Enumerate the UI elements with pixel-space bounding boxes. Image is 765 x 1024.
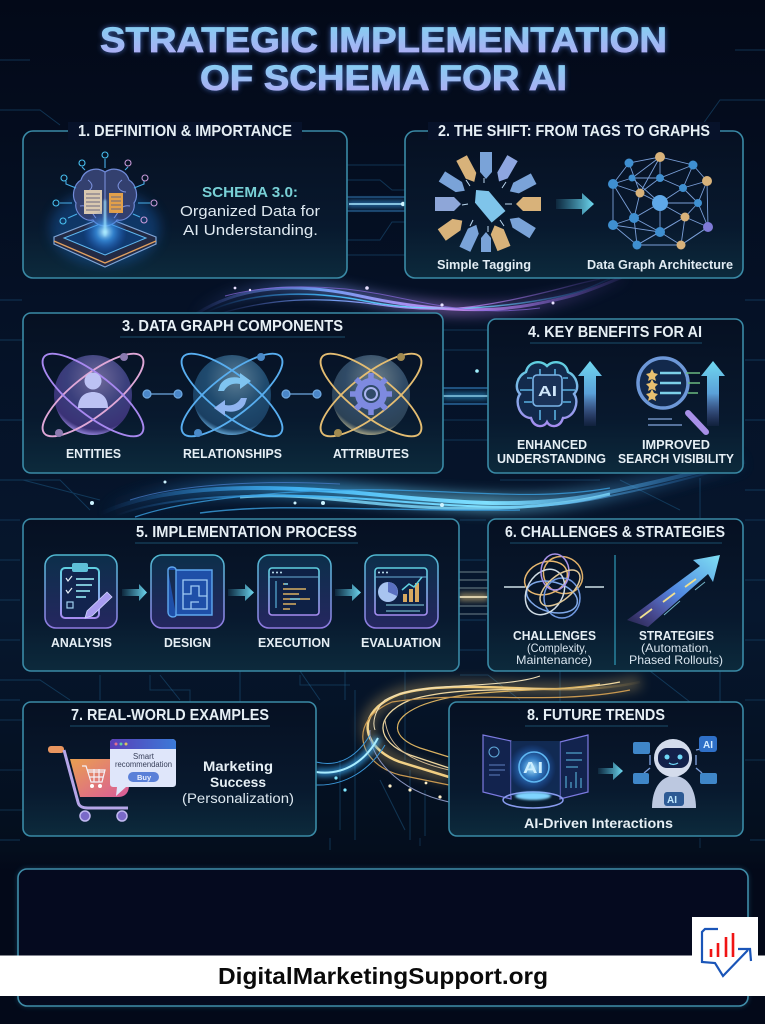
panel 8: future trends: [449, 702, 743, 836]
icon: AI brain: AI: [538, 383, 557, 400]
panel 1 text block: [180, 184, 320, 239]
arrow: tags to graph: [556, 193, 594, 215]
label: enhanced understanding: [497, 438, 606, 466]
label: evaluation: EVALUATION: [361, 636, 441, 650]
panel 5 heading: 5. IMPLEMENTATION PROCESS: [136, 524, 357, 541]
icon: AI hologram dashboard: AI: [523, 760, 543, 777]
panel 2 heading: 2. THE SHIFT: FROM TAGS TO GRAPHS: [438, 123, 710, 140]
connector: entities to relationships: [143, 390, 182, 398]
connector streak: panel 5 to panel 6: [459, 572, 488, 614]
icon: friendly robot with chat bubbles: [633, 736, 717, 808]
panel 3: data graph components: [23, 313, 443, 473]
panel 1 text block: AI Understanding.: [183, 222, 318, 239]
connector streak: panel 1 to panel 2: [347, 197, 405, 211]
label: entities: ENTITIES: [66, 447, 121, 461]
label: AI-driven interactions: AI-Driven Interactions: [524, 815, 673, 831]
arrow: design to execution: [228, 584, 254, 601]
panel 1 heading: 1. DEFINITION & IMPORTANCE: [78, 123, 292, 140]
icon: scattered tags: [435, 152, 541, 252]
arrow: hologram to robot: [598, 762, 623, 780]
panel 6: challenges and strategies: [488, 519, 743, 671]
strategies text: (Automation,: [641, 641, 712, 655]
callout: smart recommendation: [110, 739, 176, 796]
challenges text: CHALLENGES: [513, 628, 596, 643]
white footer band: [0, 956, 765, 996]
panel 1 text block: Organized Data for: [180, 203, 320, 220]
icon: magnifier over ranked results: [638, 358, 706, 432]
icon: shopping cart: [48, 746, 129, 821]
strategies text: Phased Rollouts): [629, 653, 723, 667]
icon: friendly robot with chat bubbles: AI: [667, 795, 677, 806]
arrow: up, understanding: [578, 361, 602, 426]
flowing ribbon: gold: [363, 676, 640, 802]
step tile: execution: [258, 555, 331, 628]
panel 5: implementation process: [23, 519, 459, 671]
connector streak: panel 7 to panel 8: [316, 735, 385, 792]
title: OF SCHEMA FOR AI: [200, 59, 567, 98]
icon: road arrow upward: [627, 555, 720, 627]
arrow: analysis to design: [122, 584, 147, 601]
label: improved search visibility: SEARCH VISIBILITY: [618, 452, 735, 466]
step tile: design: [151, 555, 224, 628]
panel 1: definition and importance: [23, 122, 347, 278]
label: relationships: RELATIONSHIPS: [183, 447, 282, 461]
panel 7: real-world examples: [23, 702, 316, 836]
label: enhanced understanding: UNDERSTANDING: [497, 452, 606, 466]
panel 7 text block: (Personalization): [182, 790, 294, 806]
challenges text: [513, 628, 596, 667]
panel 6 heading: 6. CHALLENGES & STRATEGIES: [505, 524, 725, 541]
panel 3 heading: 3. DATA GRAPH COMPONENTS: [122, 318, 343, 335]
footer website text: DigitalMarketingSupport.org: [218, 963, 548, 989]
callout: smart recommendation: Buy: [137, 773, 152, 782]
challenges text: Maintenance): [516, 653, 592, 667]
orb: attributes: [310, 341, 432, 449]
orb: entities: [32, 341, 154, 449]
panel 7 text block: Success: [210, 774, 266, 790]
connector: relationships to attributes: [282, 390, 321, 398]
strategies text: [629, 628, 723, 667]
icon: tangled knot: [504, 549, 604, 622]
icon: AI brain: [517, 362, 577, 426]
panel 4 heading: 4. KEY BENEFITS FOR AI: [528, 324, 702, 341]
label: analysis: ANALYSIS: [51, 636, 112, 650]
flowing ribbon: purple and blue: [190, 276, 625, 318]
panel 8 heading: 8. FUTURE TRENDS: [527, 707, 665, 724]
panel 1 text block: SCHEMA 3.0:: [202, 184, 298, 201]
icon: data graph network: [608, 152, 713, 250]
icon: AI hologram dashboard: [483, 735, 588, 808]
strategies text: STRATEGIES: [639, 628, 714, 643]
icon: friendly robot with chat bubbles: AI: [703, 740, 713, 751]
bottom empty panel: [18, 869, 748, 1006]
flowing ribbon: bright blue: [90, 462, 745, 517]
step tile: analysis: [45, 555, 117, 628]
title: [100, 21, 667, 98]
panel 4: key benefits for AI: [488, 319, 743, 473]
connector streak: panel 3 to panel 4: [443, 369, 488, 404]
label: design: DESIGN: [164, 636, 211, 650]
panel 7 text block: Marketing: [203, 758, 273, 774]
panel 7 text block: [182, 758, 294, 806]
label: enhanced understanding: ENHANCED: [517, 438, 587, 452]
arrow: execution to evaluation: [335, 584, 361, 601]
challenges text: (Complexity,: [527, 641, 587, 655]
label: data graph architecture: Data Graph Architecture: [587, 257, 733, 272]
label: simple tagging: Simple Tagging: [437, 257, 531, 272]
arrow: up, visibility: [701, 361, 725, 426]
label: execution: EXECUTION: [258, 636, 330, 650]
callout: smart recommendation: Smart: [133, 752, 155, 761]
panel 2: the shift from tags to graphs: [405, 122, 743, 278]
orb: relationships: [171, 341, 293, 449]
callout: smart recommendation: recommendation: [115, 760, 172, 769]
icon: brain on glowing chip: [50, 152, 160, 267]
label: improved search visibility: [618, 438, 735, 466]
logo: speech bubble chart: [692, 917, 758, 976]
panel 7 heading: 7. REAL-WORLD EXAMPLES: [71, 707, 269, 724]
title: STRATEGIC IMPLEMENTATION: [100, 21, 667, 60]
divider: [614, 555, 616, 665]
title: STRATEGIC IMPLEMENTATION: [100, 21, 667, 60]
label: attributes: ATTRIBUTES: [333, 447, 409, 461]
step tile: evaluation: [365, 555, 438, 628]
title: OF SCHEMA FOR AI: [200, 59, 567, 98]
label: improved search visibility: IMPROVED: [642, 438, 710, 452]
